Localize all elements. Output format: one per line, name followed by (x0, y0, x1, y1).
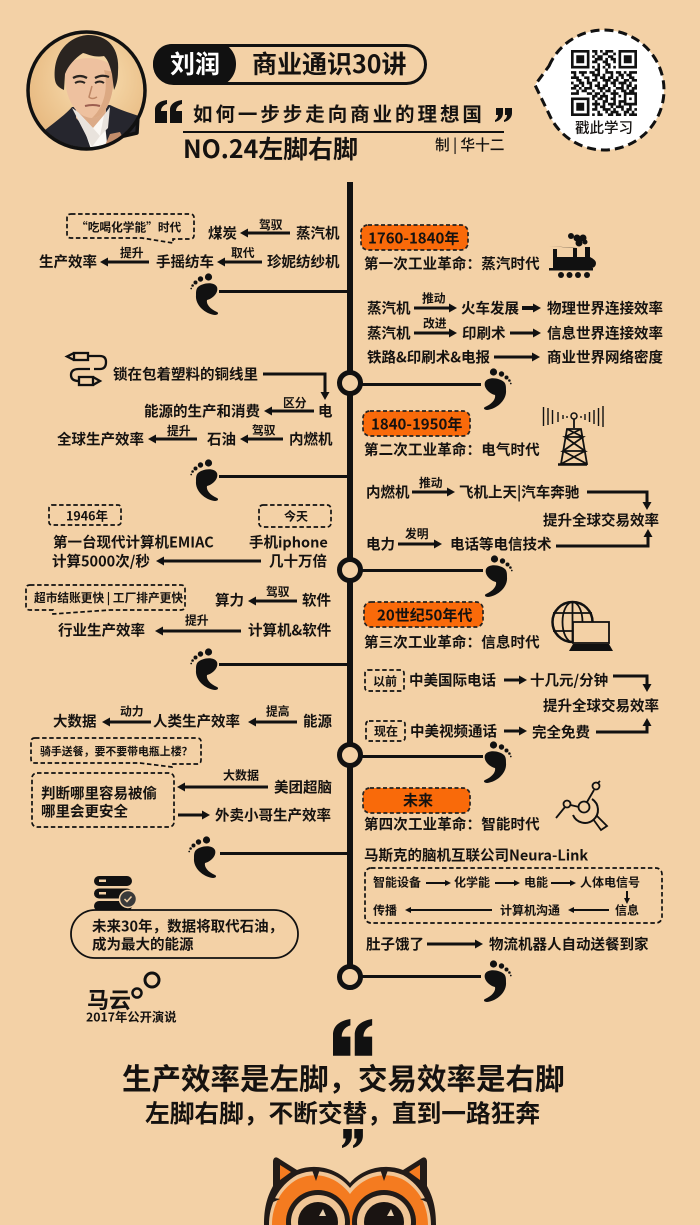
callout: rider: 骑手送餐，要不要带电瓶上楼？ (40, 743, 192, 759)
connector (220, 852, 350, 855)
text: iphone: 手机iphone (249, 531, 328, 552)
left column: third revolution production: 几十万倍 (269, 550, 327, 571)
attribution (86, 973, 177, 1026)
row: now: 中美视频通话 (410, 720, 497, 741)
flow: industry production efficiency: 提升 (185, 612, 209, 628)
connector (360, 975, 481, 978)
flow: production efficiency: 取代 (231, 244, 255, 261)
Jack Ma quote (71, 876, 298, 1026)
left column: second revolution production (57, 353, 350, 501)
icon: cable (67, 353, 106, 385)
attribution: 2017年公开演说 (86, 1008, 177, 1026)
flow: steam train physical: 推动 (422, 290, 446, 306)
flow: production efficiency: 生产效率 (39, 251, 97, 272)
row: before: 中美国际电话 (409, 669, 496, 690)
connector (219, 475, 350, 478)
dashed box: brain machine flow: 传播 (373, 902, 397, 918)
flow: computing and software (215, 583, 331, 610)
icon: closing quote mark (495, 108, 512, 122)
left foot icon (190, 648, 218, 690)
left foot icon (190, 273, 218, 315)
flow: production efficiency: 提升 (120, 244, 144, 261)
arrow: iphone to ENIAC (162, 560, 261, 562)
flow: hungry and delivery robot: 肚子饿了 (366, 933, 424, 954)
era badge: 1760-1840年 (368, 228, 459, 248)
flow: steam train physical (367, 290, 663, 318)
flow: computing and software: 算力 (215, 589, 244, 610)
right foot icon (484, 960, 512, 1002)
flow: combustion: 推动 (419, 474, 443, 491)
flow: telecommunication: 电话等电信技术 (450, 533, 552, 554)
flow: production efficiency (39, 244, 340, 272)
arrow: to electricity (263, 374, 325, 394)
icon: closing quote mark (342, 1129, 363, 1148)
row: now (366, 720, 647, 742)
headline: 生产效率是左脚，交易效率是右脚 (122, 1056, 565, 1098)
tag: 1946 (49, 505, 121, 525)
flow: data as power: 能源 (303, 710, 332, 732)
row: before: 以前 (373, 672, 397, 690)
closing quote (122, 1019, 565, 1148)
flow: printing information: 印刷术 (462, 322, 506, 343)
flow: global production efficiency (57, 422, 333, 450)
right column: first revolution (360, 225, 663, 410)
callout: rider (31, 738, 201, 767)
icon: opening quote mark (155, 100, 182, 123)
tag: today (259, 505, 331, 527)
flow: production efficiency: 珍妮纺纱机 (267, 251, 340, 272)
flow: data as power: 人类生产效率 (153, 710, 240, 732)
flow: telecommunication: 发明 (405, 525, 429, 542)
era heading: 第一次工业革命：蒸汽时代 (364, 253, 540, 274)
era heading: 第三次工业革命：信息时代 (364, 631, 540, 652)
connector (360, 569, 483, 572)
right foot icon (485, 555, 513, 597)
pill quote: 未来30年，数据将取代石油， (92, 915, 283, 936)
header (28, 30, 664, 166)
era badge: 1840-1950年 (371, 414, 462, 434)
flow: data as power: 动力 (120, 702, 144, 720)
flow: network density: 铁路&印刷术&电报 (367, 346, 490, 367)
flow: steam train physical: 火车发展 (461, 297, 519, 318)
flow: data as power: 大数据 (53, 710, 96, 732)
dashed box: brain machine flow (365, 868, 662, 923)
central timeline (340, 182, 360, 988)
callout: supermarket and factory: 超市结账更快 | 工厂排产更快 (34, 589, 183, 606)
icon: opening quote mark (333, 1019, 372, 1056)
connector (360, 755, 483, 758)
QR bubble (535, 30, 664, 150)
result: global trade efficiency: 提升全球交易效率 (543, 509, 659, 530)
row: now: 现在 (374, 722, 398, 740)
flow: hungry and delivery robot: 物流机器人自动送餐到家 (489, 933, 649, 954)
text: Neuralink: 马斯克的脑机互联公司Neura-Link (364, 844, 588, 865)
era badge: 20世纪50年代 (377, 604, 472, 626)
flow: data as power: 提高 (266, 702, 290, 720)
right foot icon (484, 741, 512, 783)
era badge (364, 602, 483, 627)
box: safety judgement: 哪里会更安全 (41, 800, 128, 821)
pill quote (71, 910, 298, 958)
QR code (571, 50, 637, 116)
era badge (363, 788, 470, 813)
flow: combustion: 飞机上天|汽车奔驰 (459, 481, 580, 502)
title pill: 商业通识30讲 (252, 45, 407, 81)
flow: Meituan brain: 美团超脑 (274, 776, 332, 797)
flow: network density (367, 346, 663, 367)
text: first computer: 第一台现代计算机EMIAC (53, 531, 214, 552)
flow: hungry and delivery robot (366, 933, 649, 954)
title pill (153, 44, 426, 84)
connector (360, 383, 481, 386)
flow: steam engine drives coal: 驾驭 (259, 216, 283, 233)
box: safety judgement: 判断哪里容易被偷 (41, 782, 157, 803)
portrait photo (28, 32, 152, 152)
flow: steam engine drives coal (208, 216, 340, 243)
flow: global production efficiency: 驾驭 (252, 422, 276, 438)
flow: courier efficiency: 外卖小哥生产效率 (215, 804, 331, 825)
pill quote: 成为最大的能源 (92, 933, 194, 954)
tag: today: 今天 (284, 508, 308, 524)
flow: electricity distinction (144, 394, 333, 422)
flow: industry production efficiency: 计算机&软件 (248, 619, 331, 640)
row: before (365, 669, 647, 691)
flow: production efficiency: 手摇纺车 (156, 251, 214, 272)
flow: industry production efficiency (58, 612, 331, 640)
flow: telecommunication: 电力 (366, 533, 395, 554)
dashed box: brain machine flow: 信息 (615, 902, 639, 918)
author credit: 制 | 华十二 (435, 134, 504, 155)
connector (219, 290, 350, 293)
callout: eating chemical energy era: “吃喝化学能”时代 (76, 218, 182, 236)
flow: combustion (366, 474, 647, 504)
right column: third revolution (360, 602, 659, 783)
row: before: 十几元/分钟 (530, 669, 608, 690)
callout: supermarket and factory (26, 585, 185, 614)
flow: Meituan brain: 大数据 (223, 766, 259, 784)
left foot icon (188, 836, 216, 878)
flow: steam engine drives coal: 煤炭 (208, 222, 237, 243)
right foot icon (484, 368, 512, 410)
flow: steam train physical: 蒸汽机 (367, 297, 411, 318)
attribution: 马云 (87, 983, 131, 1015)
flow: printing information: 蒸汽机 (367, 322, 411, 343)
callout: eating chemical energy era (67, 214, 194, 243)
flow: electricity distinction: 区分 (283, 394, 307, 411)
box: safety judgement (32, 773, 174, 827)
title pill: 刘润 (170, 45, 220, 81)
left column: third revolution production (26, 505, 350, 690)
flow: industry production efficiency: 行业生产效率 (58, 619, 145, 640)
flow: combustion: 内燃机 (366, 481, 410, 502)
icon: server (94, 876, 136, 911)
icon: globe and laptop (552, 602, 613, 651)
dashed box: brain machine flow: 智能设备 (373, 874, 421, 890)
result: global trade efficiency: 提升全球交易效率 (543, 695, 659, 716)
flow: printing information: 改进 (423, 314, 447, 332)
text: locked in copper wire: 锁在包着塑料的铜线里 (113, 364, 258, 384)
flow: telecommunication (366, 525, 648, 554)
left column: third revolution production: 计算5000次/秒 (52, 550, 150, 571)
right column: second revolution (360, 406, 659, 597)
left column: first revolution production (39, 214, 350, 315)
flow: steam engine drives coal: 蒸汽机 (296, 222, 340, 243)
flow: global production efficiency: 全球生产效率 (57, 428, 144, 450)
dashed box: brain machine flow: 计算机沟通 (500, 902, 560, 918)
flow: global production efficiency: 石油 (207, 428, 236, 450)
QR caption: 戳此学习 (575, 117, 633, 138)
flow: computing and software: 软件 (302, 589, 331, 610)
subheadline: 左脚右脚，不断交替，直到一路狂奔 (145, 1094, 540, 1130)
flow: printing information: 信息世界连接效率 (547, 322, 663, 343)
flow: global production efficiency: 内燃机 (289, 428, 333, 450)
flow: printing information (367, 314, 663, 343)
era heading: 第四次工业革命：智能时代 (364, 813, 540, 834)
flow: Meituan brain (183, 766, 332, 797)
row: now: 完全免费 (532, 721, 590, 742)
dashed box: brain machine flow: 化学能 (454, 874, 490, 890)
flow: electricity distinction: 能源的生产和消费 (144, 400, 260, 422)
left column: fourth revolution production (31, 702, 350, 878)
era heading: 第二次工业革命：电气时代 (364, 439, 540, 460)
right column: fourth revolution (360, 781, 662, 1002)
dashed box: brain machine flow: 人体电信号 (580, 874, 640, 890)
flow: electricity distinction: 电 (318, 400, 333, 422)
era badge: 未来 (403, 790, 433, 810)
issue title: NO.24左脚右脚 (183, 130, 358, 166)
flow: steam train physical: 物理世界连接效率 (547, 297, 663, 318)
tag: 1946: 1946年 (66, 506, 108, 524)
connector (219, 663, 350, 666)
icon: steam train (549, 233, 596, 278)
flow: computing and software: 驾驭 (266, 583, 290, 600)
flow: global production efficiency: 提升 (167, 422, 191, 439)
dashed box: brain machine flow: 电能 (524, 874, 548, 890)
divider under subtitle (183, 131, 504, 133)
flow: data as power (53, 702, 332, 732)
flow: network density: 商业世界网络密度 (547, 346, 663, 367)
icon: data analysis magnifier (556, 781, 607, 830)
icon: signal tower (544, 406, 603, 464)
left foot icon (190, 459, 218, 501)
subtitle with quote marks: 如何一步步走向商业的理想国 (193, 98, 485, 127)
owl mascot (264, 1157, 436, 1225)
